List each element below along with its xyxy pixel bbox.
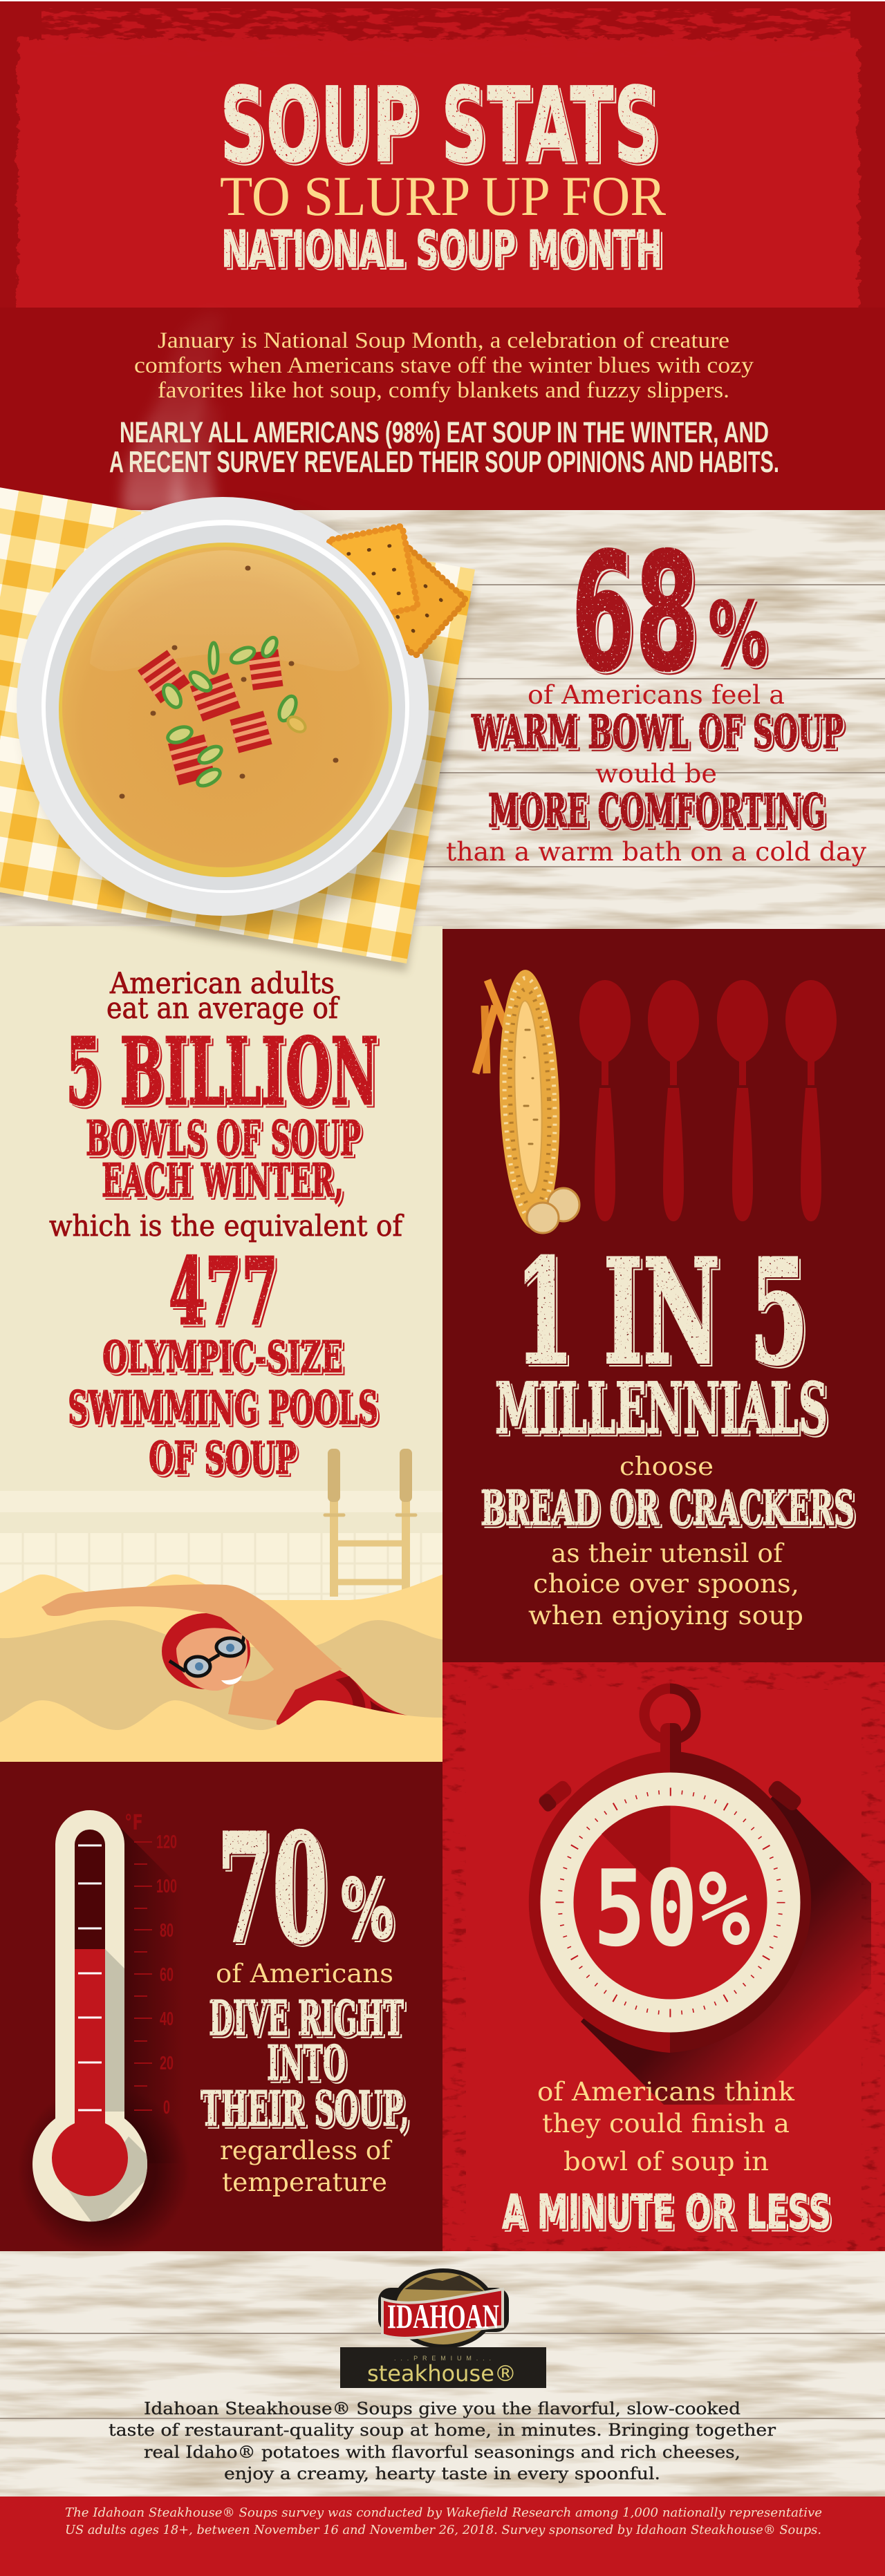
icon: soup bowl [17, 497, 467, 931]
stat text: 5 billion: 5 BILLION [66, 1018, 378, 1126]
panel: header [0, 1, 885, 322]
stopwatch long shadow [581, 1790, 871, 2105]
intro paragraph [134, 328, 754, 403]
title [220, 66, 666, 279]
temperature scale: 40 [160, 2008, 174, 2029]
stat text: 5 billion: SWIMMING POOLS [68, 1381, 378, 1435]
goggles [169, 1630, 245, 1676]
temperature scale: 20 [160, 2052, 174, 2074]
water: back wave [0, 1574, 442, 1762]
stat text: 1 in 5: choice over spoons, [533, 1569, 799, 1599]
intro paragraph: favorites like hot soup, comfy blankets and fuzzy slippers. [158, 378, 729, 403]
icon: pool ladder [325, 1449, 416, 1597]
icon: stopwatch [529, 1689, 811, 2053]
stat text: 5 billion: American adults [109, 966, 335, 1000]
neck and shoulder [228, 1659, 297, 1721]
stat text: 68 percent: % [708, 583, 767, 686]
title: TO SLURP UP FOR [220, 164, 666, 227]
intro headline [109, 416, 779, 479]
green onion rings [160, 635, 299, 789]
icon: bread loaf [495, 969, 564, 1230]
icon: spoon 3 [717, 980, 768, 1221]
swimmer [41, 1584, 419, 1729]
arm [41, 1584, 342, 1692]
stat text: 70 percent [201, 1801, 409, 2197]
stat text: 70 percent: % [340, 1862, 394, 1958]
logo: steakhouse: ...PREMIUM... [394, 2355, 491, 2362]
stat text: 5 billion: which is the equivalent of [49, 1209, 404, 1243]
soup [59, 543, 392, 877]
stat text: 50 percent [502, 2077, 831, 2240]
stat text: 5 billion [49, 966, 404, 1485]
intro paragraph: January is National Soup Month, a celebration of creature [158, 328, 729, 353]
panel: stopwatch stat [442, 1662, 885, 2251]
logo: Idahoan [378, 2268, 509, 2349]
stat text: 50 percent: bowl of soup in [563, 2147, 769, 2177]
panel: footnote [0, 2497, 885, 2576]
panel: bread stat background [442, 929, 885, 1662]
swim cap [162, 1613, 250, 1689]
temperature scale: 80 [160, 1919, 174, 1941]
stat text: 70 percent: 70 [217, 1801, 328, 1976]
panel: brand [0, 2251, 885, 2497]
stat text: 50 percent: of Americans think [537, 2077, 795, 2107]
icon: spoon 4 [785, 980, 837, 1221]
stat text: 1 in 5: choose [620, 1453, 714, 1481]
panel: pool stat [0, 926, 442, 1762]
stat text: 70 percent: THEIR SOUP, [201, 2081, 409, 2137]
stat text: 70 percent: regardless of [220, 2136, 392, 2165]
intro paragraph: comforts when Americans stave off the winter blues with cozy [134, 353, 754, 378]
stat text: 5 billion: OLYMPIC-SIZE [102, 1331, 343, 1382]
stopwatch reading: 50% [593, 1848, 750, 1970]
brand paragraph: real Idaho® potatoes with flavorful seasonings and rich cheeses, [144, 2443, 740, 2462]
panel: thermometer stat [0, 1762, 442, 2257]
stat text: 68 percent: than a warm bath on a cold day [446, 837, 866, 867]
brand paragraph: enjoy a creamy, hearty taste in every spoonful. [224, 2464, 660, 2483]
temperature scale: 60 [160, 1964, 174, 1985]
stat text: 68 percent [446, 518, 866, 867]
thermometer long shadow [17, 1825, 190, 2257]
stat text: 5 billion: 477 [169, 1238, 278, 1346]
water: front wave [0, 1700, 442, 1762]
stat text: 5 billion: OF SOUP [149, 1432, 297, 1485]
stat text: 1 in 5: when enjoying soup [528, 1601, 803, 1630]
water: middle wave [0, 1620, 442, 1762]
stat text: 5 billion: BOWLS OF SOUP [86, 1111, 361, 1167]
temperature scale: 100 [156, 1875, 177, 1897]
panel: wood table background [0, 510, 885, 929]
temperature scale: °F [124, 1811, 143, 1835]
panel: footnote: US adults ages 18+, between November 16 and November 26, 2018. Survey sponsored by Idahoan Steakhouse® Soups. [65, 2523, 821, 2537]
stat text: 5 billion: eat an average of [106, 991, 340, 1025]
napkin [0, 484, 475, 972]
smile [221, 1675, 242, 1684]
stat text: 50 percent: they could finish a [542, 2109, 790, 2138]
logo: steakhouse: steakhouse® [367, 2360, 516, 2387]
stat text: 68 percent: 68 [571, 518, 699, 708]
bacon pieces [138, 649, 283, 785]
stat text: 68 percent: of Americans feel a [528, 680, 785, 710]
swimsuit [277, 1655, 419, 1729]
logo: Idahoan: IDAHOAN [387, 2297, 499, 2335]
icon: breadsticks [476, 980, 508, 1073]
temperature scale [124, 1811, 177, 2118]
panel: bread stat content [476, 969, 855, 1630]
icon: spoon 1 [579, 980, 631, 1221]
icon: thermometer [32, 1810, 147, 2221]
stat text: 70 percent: INTO [267, 2036, 346, 2091]
face [176, 1628, 248, 1691]
icon: round crackers [527, 1188, 579, 1233]
stat text: 70 percent: DIVE RIGHT [209, 1991, 404, 2047]
pepper specks [122, 568, 336, 796]
steam [122, 311, 225, 511]
brand paragraph: Idahoan Steakhouse® Soups give you the flavorful, slow-cooked [144, 2399, 740, 2418]
stat text: 1 in 5: as their utensil of [551, 1539, 784, 1568]
brand paragraph [109, 2399, 776, 2483]
panel: footnote: The Idahoan Steakhouse® Soups survey was conducted by Wakefield Research among 1,000 nationally representative [65, 2506, 822, 2520]
logo: steakhouse [340, 2347, 546, 2388]
temperature scale: 0 [163, 2096, 170, 2118]
icon: spoon 2 [648, 980, 699, 1221]
brand paragraph: taste of restaurant-quality soup at home, in minutes. Bringing together [109, 2420, 776, 2440]
icon: crackers [329, 526, 467, 657]
temperature scale: 120 [156, 1831, 177, 1852]
stat text: 1 in 5 [481, 1228, 855, 1630]
stat text: 70 percent: temperature [222, 2168, 387, 2197]
pool wall [0, 1491, 442, 1623]
stat text: 70 percent: of Americans [216, 1959, 393, 1989]
panel: intro [0, 308, 885, 511]
stat text: 68 percent: would be [595, 759, 717, 789]
stat text: 5 billion: EACH WINTER, [102, 1154, 344, 1207]
